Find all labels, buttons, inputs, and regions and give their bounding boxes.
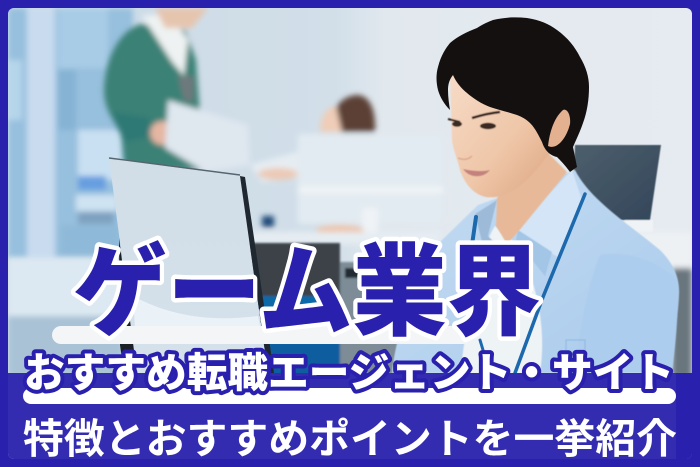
blurred background: window and pillar (8, 8, 136, 259)
title: ゲーム業界: ゲーム業界 (73, 237, 541, 349)
blurred background: desk on the left (8, 258, 123, 376)
title underline bar (52, 326, 472, 344)
right dark monitor (572, 145, 661, 232)
man's ear (548, 110, 570, 147)
subtitle underline bar (23, 388, 676, 404)
man's hair (436, 17, 589, 172)
blurred colleague behind white monitor (250, 95, 443, 244)
blurred dark monitor behind the title (250, 243, 400, 376)
foreground monitor (109, 158, 274, 373)
man's neck and face (448, 70, 567, 244)
subtitle: おすすめ転職エージェント・サイト: おすすめ転職エージェント・サイト (24, 350, 674, 396)
lanyard (472, 194, 585, 373)
lower band (8, 373, 692, 459)
man's shirt (392, 170, 679, 373)
tagline: 特徴とおすすめポイントを一挙紹介: 特徴とおすすめポイントを一挙紹介 (23, 416, 677, 462)
blurred colleague in green cardigan (104, 8, 250, 172)
